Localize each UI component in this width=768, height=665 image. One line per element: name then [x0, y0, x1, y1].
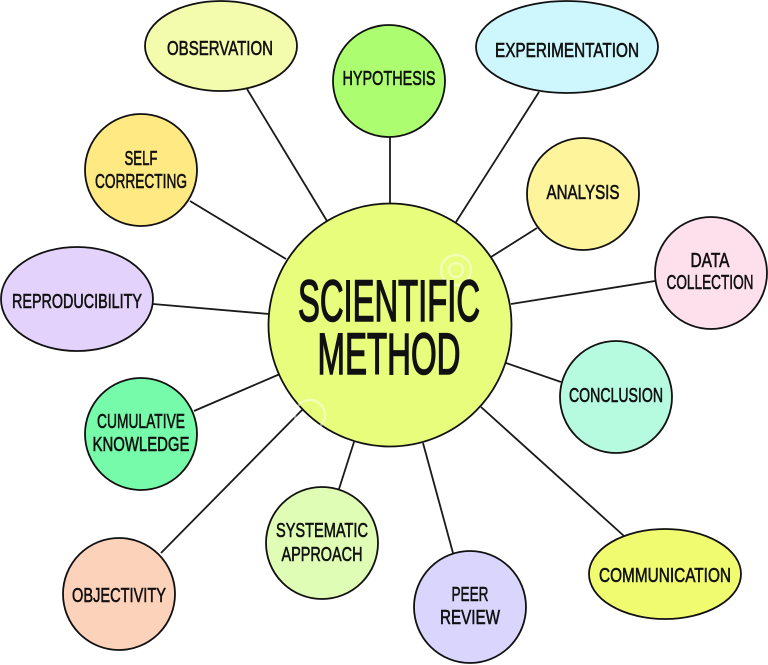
- node: communication: COMMUNICATION: [599, 565, 731, 587]
- node: conclusion: CONCLUSION: [569, 385, 663, 407]
- node: systematic approach: SYSTEMATIC: [276, 520, 368, 542]
- node: objectivity: [63, 538, 175, 650]
- node: experimentation: EXPERIMENTATION: [495, 40, 639, 62]
- node: reproducibility: REPRODUCIBILITY: [12, 291, 142, 313]
- node: reproducibility: [1, 247, 153, 351]
- node: peer review: REVIEW: [440, 607, 500, 629]
- node: analysis: ANALYSIS: [546, 182, 620, 204]
- node: conclusion: [560, 341, 672, 453]
- node: hypothesis: HYPOTHESIS: [342, 68, 436, 90]
- node: communication: [589, 529, 741, 619]
- node: peer review: [414, 551, 526, 663]
- connector lines: [153, 89, 655, 553]
- node: data collection: [655, 217, 767, 329]
- central node: scientific method: SCIENTIFIC: [298, 269, 480, 334]
- node: analysis: [527, 138, 639, 250]
- node: objectivity: OBJECTIVITY: [72, 585, 166, 607]
- central node: scientific method: METHOD: [318, 322, 460, 387]
- node: self correcting: CORRECTING: [95, 171, 187, 193]
- central node: scientific method: [268, 204, 512, 446]
- node: systematic approach: [266, 487, 378, 599]
- node: cumulative knowledge: CUMULATIVE: [97, 411, 185, 433]
- node: observation: OBSERVATION: [167, 38, 273, 60]
- node: systematic approach: APPROACH: [282, 544, 362, 566]
- node: self correcting: [85, 114, 197, 226]
- node: peer review: PEER: [452, 584, 488, 606]
- node: hypothesis: [333, 25, 445, 137]
- node: cumulative knowledge: [85, 378, 197, 490]
- node: experimentation: [476, 1, 658, 93]
- node: self correcting: SELF: [124, 148, 158, 170]
- node: observation: [145, 1, 297, 91]
- node: data collection: DATA: [690, 250, 730, 272]
- node: cumulative knowledge: KNOWLEDGE: [92, 434, 190, 456]
